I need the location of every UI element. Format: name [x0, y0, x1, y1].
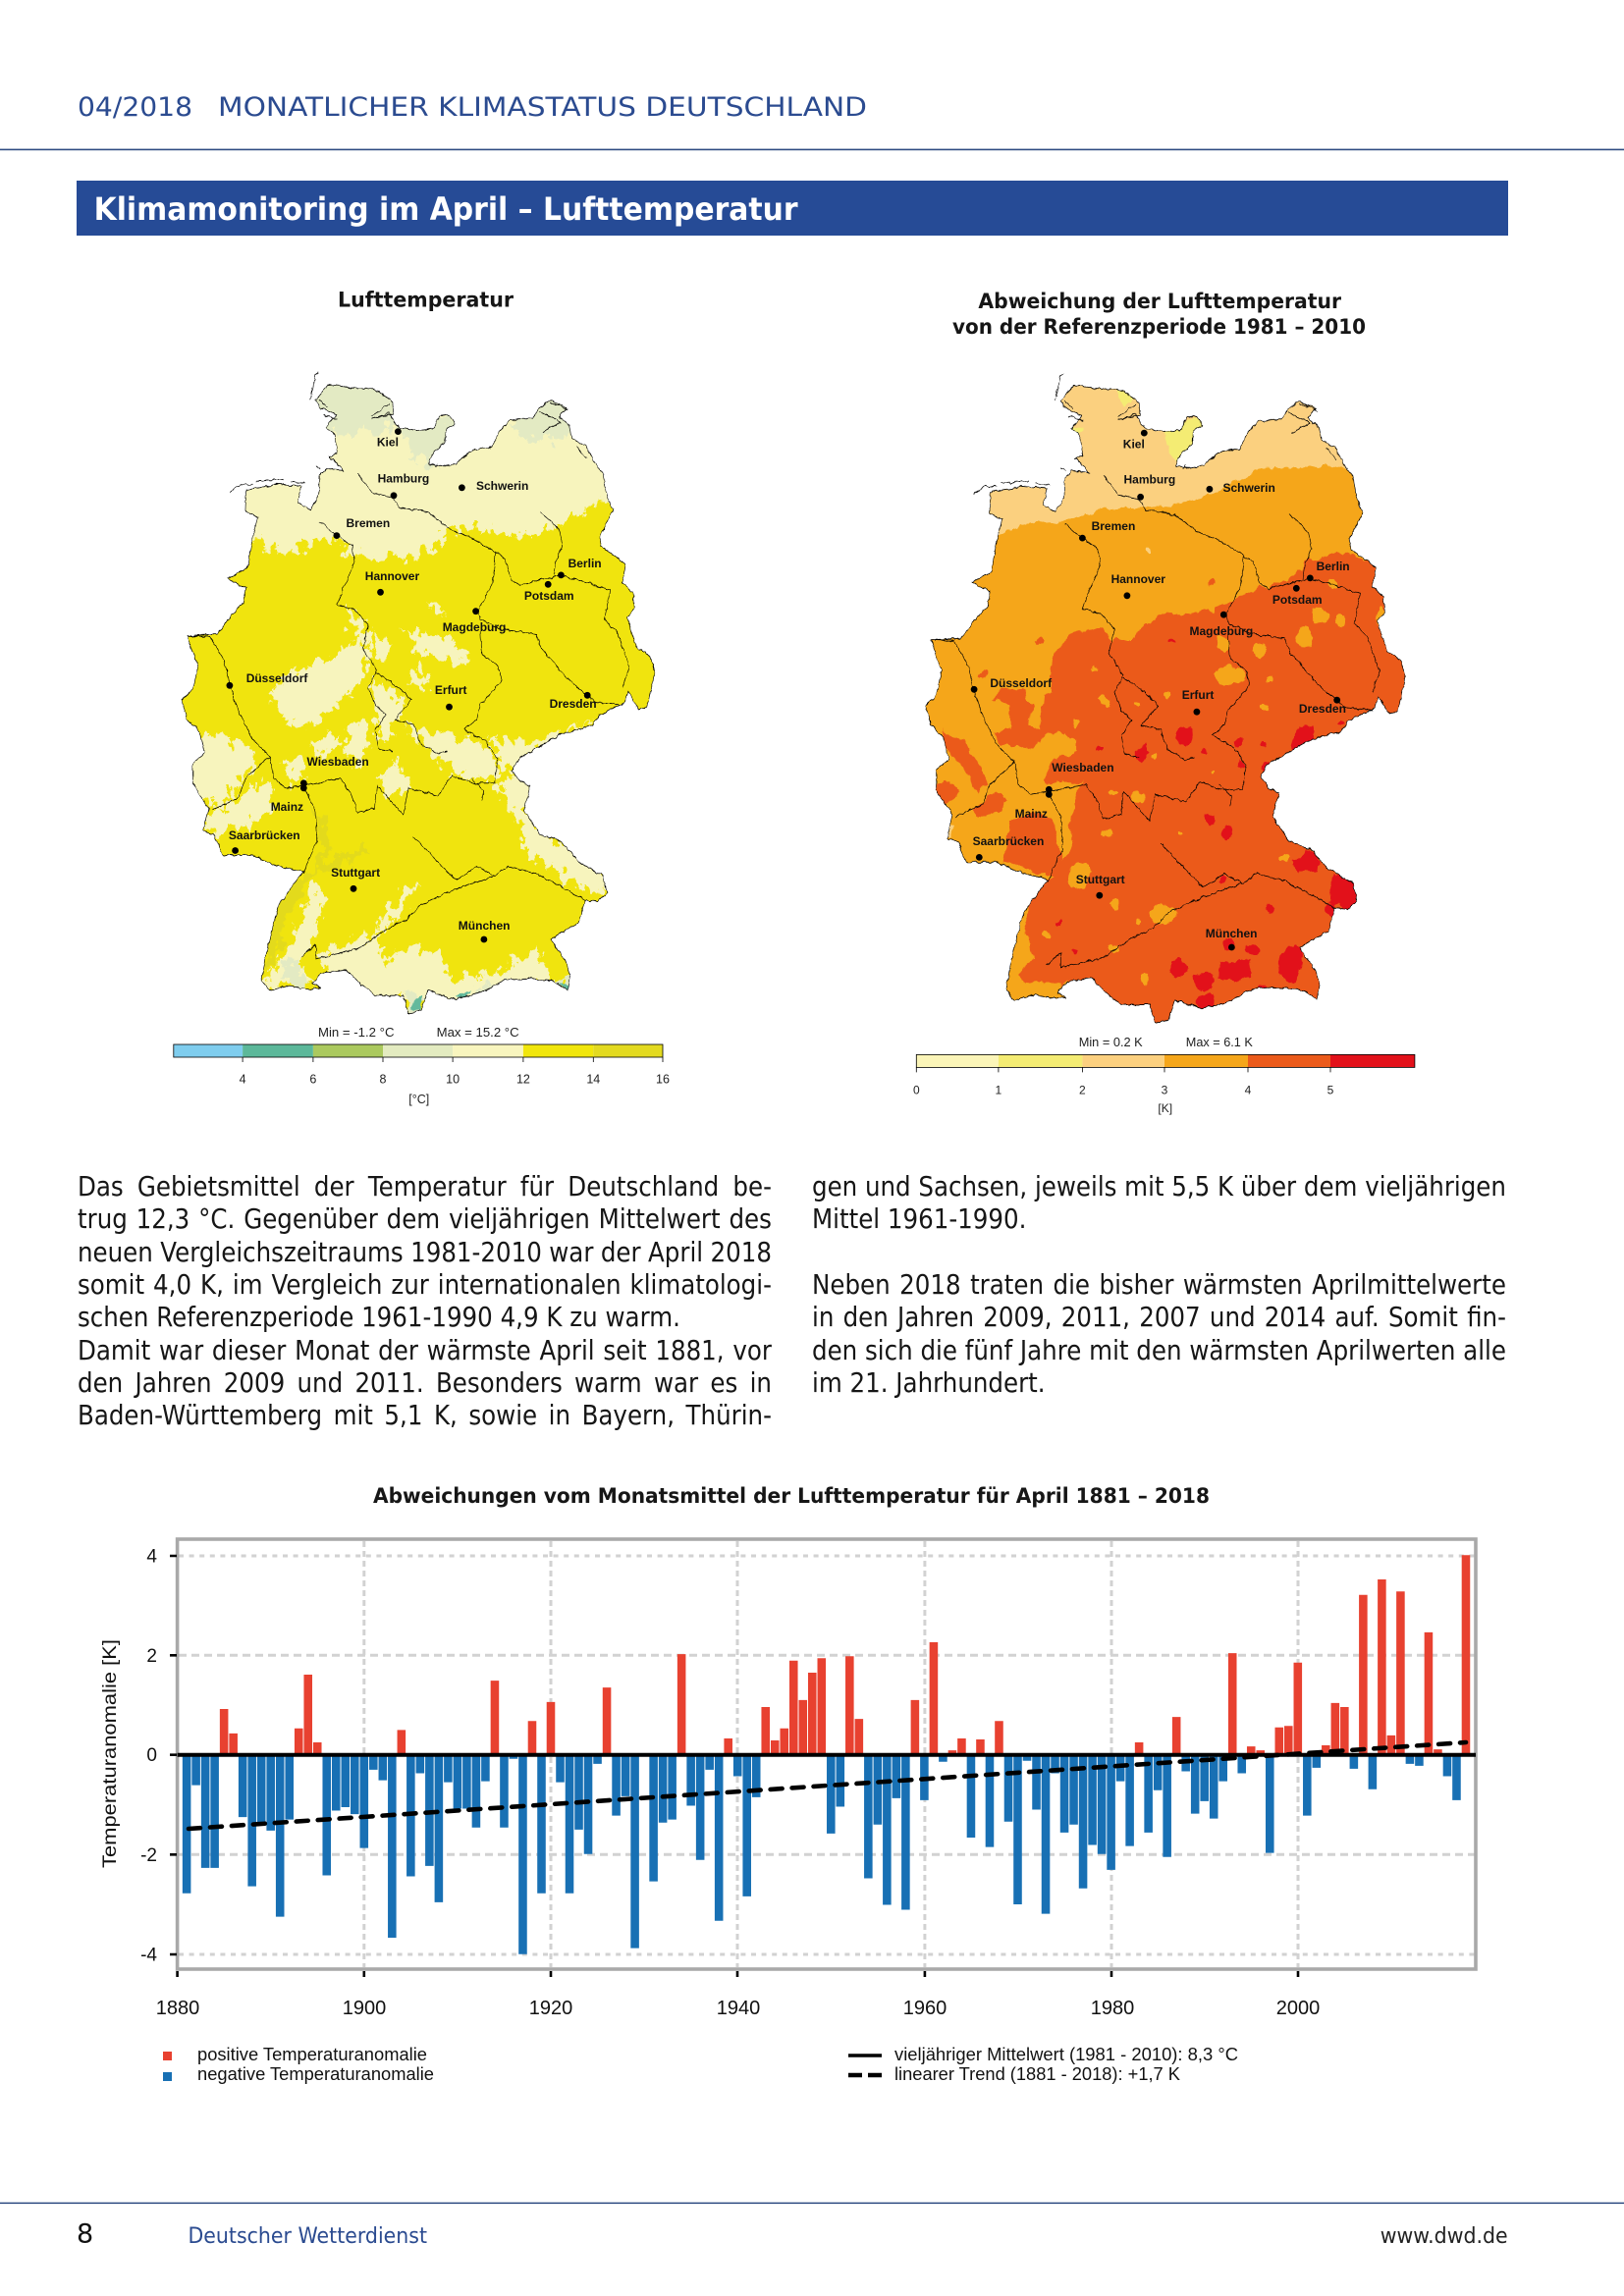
x axis labels: 1900	[343, 1998, 386, 2019]
city labels: Hannover	[365, 569, 419, 583]
trend line	[189, 1742, 1466, 1829]
city labels: Schwerin	[476, 479, 528, 493]
city labels: Düsseldorf	[990, 676, 1053, 690]
axis ticks	[170, 1556, 1298, 1977]
city labels	[226, 428, 602, 942]
x axis labels: 1980	[1091, 1998, 1134, 2019]
legend: anomaly colour bar: 5	[1327, 1084, 1334, 1097]
city labels: Berlin	[1317, 560, 1350, 573]
text block: right column	[812, 1170, 1506, 1399]
city labels: Wiesbaden	[306, 755, 369, 769]
city labels	[971, 430, 1350, 950]
legend: positive	[163, 2052, 172, 2060]
legend: temperature colour bar: Max = 15.2 °C	[437, 1025, 519, 1040]
x axis labels: 1940	[717, 1998, 760, 2019]
legend: temperature colour bar: 8	[380, 1072, 387, 1086]
legend: temperature colour bar: Min = -1.2 °C	[318, 1025, 395, 1040]
y axis labels	[140, 1547, 157, 1966]
legend: trend	[848, 2073, 882, 2077]
chart legend: vieljähriger Mittelwert (1981 - 2010): 8,3 °C	[894, 2045, 1238, 2064]
legend: anomaly colour bar: [K]	[1158, 1101, 1172, 1115]
legend: temperature colour bar: 10	[446, 1072, 460, 1086]
legend: anomaly colour bar	[913, 1035, 1415, 1115]
2 to 3 K north	[990, 385, 1347, 535]
heading: temperature map: Lufttemperatur	[338, 289, 514, 312]
x axis labels	[156, 1998, 1320, 2019]
heading: anomaly map: von der Referenzperiode 1981 – 2010	[952, 315, 1366, 339]
city labels: Kiel	[377, 436, 399, 450]
legend: anomaly colour bar: Min = 0.2 K	[1079, 1035, 1143, 1049]
city labels: Düsseldorf	[246, 671, 308, 685]
above 5 K	[1056, 640, 1365, 1009]
y axis labels: 0	[146, 1745, 157, 1766]
city labels: Dresden	[1299, 702, 1346, 716]
text block: left column: Das Gebietsmittel der Temperatur für Deutschland be-	[78, 1170, 772, 1202]
text block: right column: Neben 2018 traten die bisher wärmsten Aprilmittelwerte	[812, 1268, 1506, 1301]
x axis labels: 2000	[1276, 1998, 1320, 2019]
city labels: Stuttgart	[1076, 873, 1125, 886]
city labels: München	[459, 919, 510, 933]
city labels: Mainz	[271, 800, 303, 814]
chart legend: positive Temperaturanomalie	[197, 2045, 427, 2064]
city labels: Kiel	[1123, 438, 1145, 452]
text block: right column: im 21. Jahrhundert.	[812, 1366, 1046, 1399]
x axis labels: 1960	[903, 1998, 947, 2019]
website: www.dwd.de	[1380, 2224, 1508, 2249]
city labels: Hamburg	[1123, 472, 1175, 486]
text block: left column: somit 4,0 K, im Vergleich zur internationalen klimatologi-	[78, 1268, 772, 1301]
legend: anomaly colour bar: 2	[1079, 1084, 1086, 1097]
y axis title: Temperaturanomalie [K]	[100, 1639, 121, 1868]
legend: temperature colour bar: 4	[240, 1072, 246, 1086]
legend: anomaly colour bar: 1	[996, 1084, 1002, 1097]
city labels: Dresden	[550, 697, 597, 711]
3 to 4 K patches	[1040, 579, 1383, 995]
city labels: Erfurt	[1182, 688, 1214, 702]
banner heading: Klimamonitoring im April – Lufttemperatur	[94, 190, 798, 228]
bar chart: April temperature anomalies	[100, 1539, 1476, 2019]
heading: anomaly map	[952, 290, 1366, 339]
text block: right column: Mittel 1961-1990.	[812, 1202, 1027, 1235]
legend: temperature colour bar: 6	[309, 1072, 316, 1086]
map: air temperature	[181, 371, 656, 1015]
y axis labels: -4	[140, 1946, 157, 1966]
legend: temperature colour bar: [°C]	[408, 1093, 429, 1106]
section banner	[77, 181, 1508, 236]
publisher: Deutscher Wetterdienst	[189, 2224, 427, 2249]
text block: left column: trug 12,3 °C. Gegenüber dem vieljährigen Mittelwert des	[78, 1202, 772, 1235]
city labels: Wiesbaden	[1052, 761, 1114, 774]
city labels: Magdeburg	[443, 620, 506, 634]
warm band along the Rhine	[263, 808, 371, 976]
x axis labels: 1880	[156, 1998, 199, 2019]
city labels: Bremen	[1092, 519, 1135, 533]
city labels: München	[1206, 927, 1257, 940]
city labels: Potsdam	[1272, 593, 1323, 607]
city labels: Erfurt	[435, 683, 467, 697]
y axis labels: 4	[146, 1547, 157, 1568]
legend: anomaly colour bar: Max = 6.1 K	[1186, 1035, 1253, 1049]
city labels: Hamburg	[378, 471, 429, 485]
y axis labels: -2	[140, 1845, 157, 1866]
header title: 04/2018	[78, 92, 192, 123]
page number: 8	[77, 2218, 93, 2249]
heading: anomaly map: Abweichung der Lufttemperatur	[978, 290, 1342, 313]
city labels: Magdeburg	[1190, 624, 1253, 638]
city labels: Berlin	[568, 557, 602, 570]
text block: left column: schen Referenzperiode 1961-1990 4,9 K zu warm.	[78, 1301, 680, 1333]
city labels: Saarbrücken	[229, 828, 300, 842]
text block: right column: in den Jahren 2009, 2011, 2007 und 2014 auf. Somit fin-	[812, 1301, 1506, 1333]
chart title: Abweichungen vom Monatsmittel der Lufttemperatur für April 1881 – 2018	[373, 1484, 1210, 1508]
chart legend: negative Temperaturanomalie	[197, 2064, 434, 2084]
text block: left column: Baden-Württemberg mit 5,1 K, sowie in Bayern, Thürin-	[78, 1399, 772, 1431]
legend: temperature colour bar: 12	[516, 1072, 530, 1086]
legend: temperature colour bar: 14	[586, 1072, 600, 1086]
city labels: Mainz	[1015, 807, 1048, 821]
zero line	[178, 1753, 1476, 1757]
x axis labels: 1920	[529, 1998, 572, 2019]
legend: mean	[848, 2054, 882, 2057]
city labels: Hannover	[1111, 572, 1165, 586]
text block: right column: gen und Sachsen, jeweils mit 5,5 K über dem vieljährigen	[812, 1170, 1506, 1202]
city labels: Saarbrücken	[973, 834, 1044, 848]
legend: anomaly colour bar: 3	[1162, 1084, 1168, 1097]
text block: left column: neuen Vergleichszeitraums 1981-2010 war der April 2018	[78, 1236, 772, 1268]
legend: temperature colour bar	[174, 1025, 670, 1106]
city labels: Potsdam	[524, 589, 574, 603]
text block: left column	[78, 1170, 772, 1431]
text block: right column: den sich die fünf Jahre mit den wärmsten Aprilwerten alle	[812, 1334, 1506, 1366]
city labels: Bremen	[346, 516, 390, 530]
city labels: Schwerin	[1223, 481, 1275, 495]
4 to 5 K	[931, 551, 1422, 1037]
positive anomaly bars	[220, 1555, 1470, 1755]
legend: negative	[163, 2072, 172, 2081]
legend: anomaly colour bar: 4	[1245, 1084, 1252, 1097]
y axis labels: 2	[146, 1646, 157, 1667]
chart legend: linearer Trend (1881 - 2018): +1,7 K	[894, 2064, 1180, 2084]
chart legend	[163, 2045, 1238, 2084]
legend: temperature colour bar: 16	[656, 1072, 670, 1086]
header title: MONATLICHER KLIMASTATUS DEUTSCHLAND	[218, 92, 867, 123]
legend: anomaly colour bar: 0	[913, 1084, 920, 1097]
city labels: Stuttgart	[331, 866, 380, 880]
negative anomaly bars	[183, 1755, 1461, 1954]
footer	[0, 2203, 1624, 2249]
text block: left column: Damit war dieser Monat der wärmste April seit 1881, vor	[78, 1334, 772, 1366]
chart frame	[178, 1539, 1476, 1969]
map: temperature anomaly	[925, 373, 1406, 1023]
text block: left column: den Jahren 2009 und 2011. Besonders warm war es in	[78, 1366, 772, 1399]
